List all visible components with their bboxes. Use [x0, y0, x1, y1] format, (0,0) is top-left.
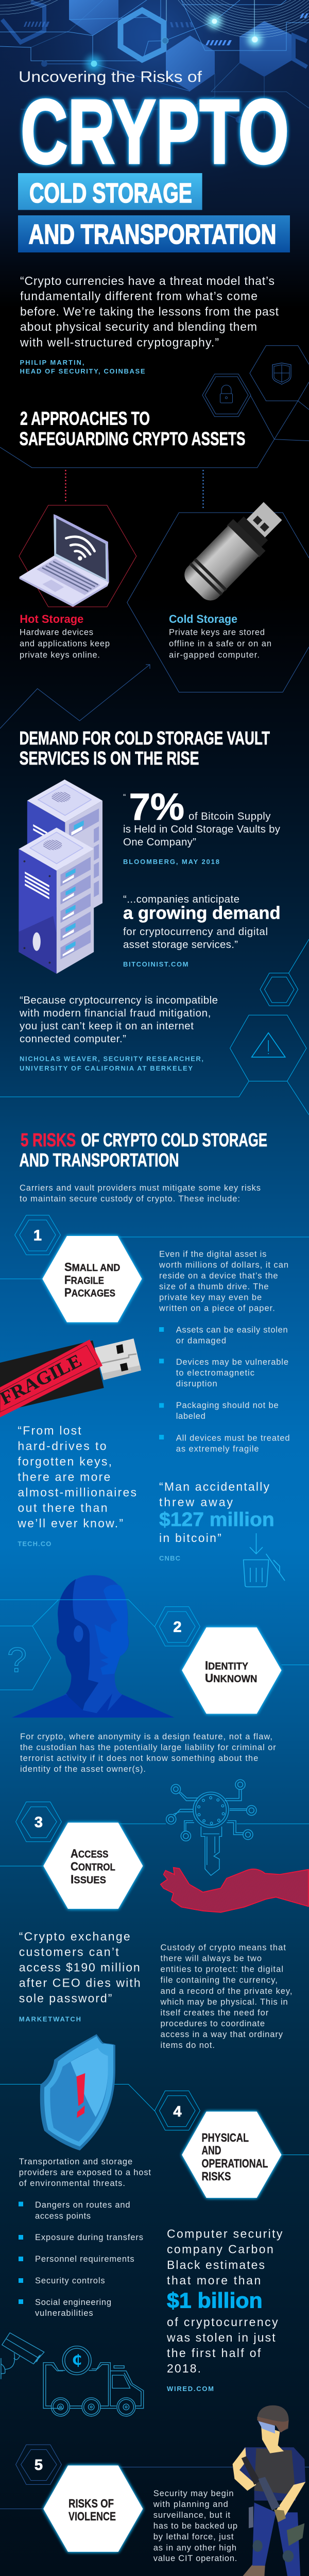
quote: 7 percent statistic: of Bitcoin Supply — [188, 810, 271, 822]
quote: 1 billion stolen — [166, 2227, 283, 2375]
opening quote: before. We’re taking the lessons from the past — [20, 305, 279, 318]
quote: 127 million in bitcoin: $127 million — [159, 1509, 274, 1531]
quote: growing demand — [123, 893, 281, 951]
number hexagon 1: 1 — [33, 1228, 42, 1244]
risk 3 label hexagon: CONTROL — [71, 1860, 115, 1873]
heading: demand for cold storage — [20, 727, 270, 769]
illustration: usb with fragile label — [0, 1338, 141, 1417]
risk 1 description: Even if the digital asset is — [159, 1249, 266, 1259]
risk 1 description: worth millions of dollars, it can — [159, 1260, 288, 1269]
server drive bays — [60, 857, 91, 959]
source: Bitcoinist: BITCOINIST.COM — [123, 960, 188, 968]
risk 1 connector lines — [0, 1237, 309, 1279]
quote: 127 million in bitcoin: “Man accidentally — [159, 1480, 270, 1494]
opening quote: “Crypto currencies have a threat model that’s — [20, 274, 274, 287]
header tech artwork — [0, 0, 309, 216]
risk 3 description: and a record of the private key, — [161, 1987, 293, 1996]
risk 1 bullet list: as extremely fragile — [176, 1445, 259, 1454]
quote: 190 million: customers can’t — [19, 1945, 119, 1958]
quote: Nicholas Weaver: with modern financial fraud mitigation, — [19, 1007, 211, 1019]
quote: Nicholas Weaver — [19, 994, 218, 1045]
quote: 190 million — [19, 1930, 141, 2005]
illustration: armed security guard — [233, 2405, 305, 2576]
source: Nicholas Weaver — [20, 1055, 203, 1072]
quote: growing demand: a growing demand — [123, 904, 281, 923]
hexagon network with warning icon — [0, 939, 309, 1115]
icon: laptop with wifi — [20, 514, 109, 607]
risk 3 description: items do not. — [161, 2041, 215, 2050]
risk 4 connector lines — [0, 2084, 309, 2155]
quote: almost-millionaires: we’ll ever know.” — [17, 1517, 123, 1530]
intro text: to maintain secure custody of crypto. These include: — [20, 1194, 240, 1204]
risk 2 description: terrorist activity if it does not know something about the — [20, 1754, 258, 1763]
risk 1 label hexagon: SMALL AND — [64, 1260, 120, 1274]
risk 3 description: Custody of crypto means that — [161, 1943, 286, 1953]
risk 1 bullet list: to electromagnetic — [176, 1368, 254, 1378]
banner: cold storage: COLD STORAGE — [29, 178, 192, 209]
quote: almost-millionaires: “From lost — [18, 1424, 81, 1437]
risk 1 bullet list: labeled — [176, 1412, 205, 1421]
number hexagon 2 — [154, 1607, 200, 1646]
risk 2 description: the custodian has the potentially large liability for criminal or — [20, 1743, 276, 1752]
dotted connector: hot storage — [65, 470, 66, 502]
quote: 190 million: sole password” — [19, 1991, 112, 2005]
source: CNBC: CNBC — [159, 1554, 181, 1562]
risk 4 label hexagon: RISKS — [202, 2170, 231, 2183]
intro text: Carriers and vault providers must mitigate some key risks — [20, 1183, 261, 1193]
text block: cold storage — [169, 613, 271, 659]
hexagon: cold storage — [127, 513, 309, 692]
source: Marketwatch: MARKETWATCH — [19, 2015, 81, 2023]
source: Tech.co: TECH.CO — [18, 1540, 51, 1548]
heading: 2 approaches — [20, 408, 245, 449]
risk 3 description: file containing the currency, — [161, 1976, 278, 1985]
risk 5 label hexagon: RISKS OF — [68, 2497, 114, 2510]
risk 3 description: entities to protect: the digital — [161, 1965, 283, 1974]
source: Bloomberg: BLOOMBERG, MAY 2018 — [123, 858, 219, 866]
intro text — [20, 1183, 261, 1204]
risk 4 label hexagon — [182, 2112, 281, 2198]
banner: cold storage — [18, 173, 202, 210]
risk 1 description — [159, 1249, 288, 1313]
source: Nicholas Weaver: NICHOLAS WEAVER, SECURITY RESEARCHER, — [20, 1055, 203, 1062]
text block: hot storage: private keys online. — [20, 650, 100, 659]
risk 1 label hexagon — [42, 1236, 142, 1322]
illustration: anonymous head silhouette — [12, 1575, 175, 1718]
text block: hot storage — [20, 613, 110, 659]
risk 4 bullet list: Dangers on routes and — [35, 2200, 130, 2210]
arrow: rising zig-zag — [0, 665, 150, 728]
quote: 7 percent statistic: is Held in Cold Storage Vaults by — [123, 823, 281, 835]
quote: 7 percent statistic: 7% — [129, 786, 184, 828]
risk 1 bullet list: or damaged — [176, 1336, 226, 1345]
risk 3 description: procedures to coordinate — [161, 2019, 265, 2028]
risk 3 description — [160, 1943, 293, 2050]
text block: cold storage: offline in a safe or on an — [169, 639, 271, 649]
risk 4 bullet list — [19, 2200, 143, 2318]
risk 1 bullet list: All devices must be treated — [176, 1433, 290, 1443]
quote: 1 billion stolen: that more than — [167, 2274, 261, 2287]
risk 2 label hexagon: UNKNOWN — [205, 1671, 257, 1685]
risk 2 label hexagon: IDENTITY — [205, 1658, 248, 1672]
risk 1 bullet list: Packaging should not be — [176, 1401, 279, 1410]
quote: growing demand: asset storage services.” — [123, 939, 238, 951]
quote: almost-millionaires: out there than — [18, 1501, 108, 1515]
quote: Nicholas Weaver: “Because cryptocurrency is incompatible — [20, 994, 218, 1006]
icon: warning triangle — [252, 1033, 285, 1057]
quote: 190 million: “Crypto exchange — [19, 1930, 130, 1943]
text block: cold storage: Cold Storage — [169, 613, 237, 625]
risk 4 label hexagon: OPERATIONAL — [202, 2157, 268, 2170]
quote: 127 million in bitcoin — [159, 1480, 274, 1545]
risk 5 description: surveillance, but it — [153, 2511, 230, 2520]
number hexagon 2: 2 — [173, 1619, 181, 1636]
risk 4 description: providers are exposed to a host — [19, 2168, 151, 2177]
quote: growing demand: “...companies anticipate — [123, 893, 239, 905]
risk 4 bullet list: access points — [35, 2211, 91, 2221]
number hexagon 5: 5 — [35, 2457, 43, 2473]
quote: growing demand: for cryptocurrency and digital — [123, 926, 268, 938]
quote: almost-millionaires: hard-drives to — [18, 1439, 107, 1453]
risk 2 label hexagon — [182, 1628, 281, 1714]
title: uncovering the risks of: Uncovering the Risks of — [19, 69, 202, 86]
icon: usb drive — [179, 495, 289, 606]
quote: almost-millionaires: there are more — [18, 1470, 110, 1484]
risk 4 bullet list: Personnel requirements — [35, 2255, 134, 2264]
icon: shield — [272, 363, 291, 384]
icon: trash can — [244, 1533, 285, 1587]
risk 4 bullet list: Social engineering — [35, 2298, 111, 2307]
risk 4 description — [19, 2157, 151, 2188]
heading: 5 risks: AND TRANSPORTATION — [20, 1149, 179, 1171]
text block: hot storage: and applications keep — [20, 639, 110, 649]
icon: armored truck with coin — [43, 2346, 144, 2416]
risk 3 label hexagon — [43, 1823, 143, 1909]
quote: 7 percent statistic: “ — [123, 793, 126, 802]
text block: cold storage: Private keys are stored — [169, 628, 265, 637]
quote: almost-millionaires — [17, 1424, 136, 1530]
risk 5 description: as in any other high — [153, 2543, 236, 2552]
risk 2 description: identity of the asset owner(s). — [20, 1765, 146, 1774]
risk 5 description — [153, 2489, 237, 2563]
quote: 1 billion stolen: 2018. — [167, 2362, 201, 2375]
quote: 1 billion stolen: $1 billion — [167, 2288, 263, 2312]
number hexagon 3: 3 — [35, 1815, 43, 1831]
number hexagon 4: 4 — [173, 2104, 181, 2120]
quote: 190 million: after CEO dies with — [19, 1976, 141, 1989]
number hexagon 3 — [16, 1802, 61, 1842]
risk 1 label hexagon: PACKAGES — [64, 1286, 115, 1299]
risk 3 label hexagon: ACCESS — [71, 1847, 108, 1860]
quote: 190 million: access $190 million — [19, 1961, 140, 1974]
risk 1 description: size of a thumb drive. The — [159, 1282, 269, 1292]
risk 5 description: Security may begin — [153, 2489, 234, 2498]
text block: hot storage: Hardware devices — [20, 628, 93, 637]
risk 4 description: of environmental threats. — [19, 2179, 125, 2188]
quote: almost-millionaires: almost-millionaires — [18, 1485, 136, 1499]
risk 3 description: access in a way that ordinary — [161, 2030, 283, 2039]
risk 5 description: value CIT operation. — [153, 2554, 237, 2563]
hexagon network with lock and shield icons — [0, 346, 309, 468]
risk 2 description — [20, 1732, 276, 1774]
quote: 1 billion stolen: company Carbon — [167, 2243, 273, 2256]
risk 5 label hexagon: VIOLENCE — [68, 2510, 116, 2523]
risk 1 description: reside on a device that’s the — [159, 1272, 278, 1281]
quote: 1 billion stolen: the first half of — [167, 2346, 261, 2360]
risk 1 description: private key may even be — [159, 1293, 262, 1302]
risk 4 bullet list: Exposure during transfers — [35, 2233, 143, 2242]
quote: Nicholas Weaver: connected computer.” — [20, 1033, 126, 1045]
quote: almost-millionaires: forgotten keys, — [18, 1455, 112, 1468]
icon: padlock — [220, 385, 233, 403]
quote: 7 percent statistic — [123, 786, 281, 848]
illustration: warning shield — [40, 2034, 115, 2150]
risk 3 description: itself creates the need for — [161, 2008, 269, 2018]
illustration: red wireframe hand — [161, 1868, 308, 1912]
quote: 1 billion stolen: Black estimates — [167, 2258, 265, 2272]
risk 1 bullet list: Devices may be vulnerable — [176, 1358, 288, 1367]
heading: demand for cold storage: SERVICES IS ON THE RISE — [20, 748, 199, 769]
quote: 127 million in bitcoin: in bitcoin” — [159, 1531, 221, 1545]
risk 4 label hexagon: AND — [202, 2144, 221, 2157]
risk 1 label hexagon: FRAGILE — [64, 1273, 104, 1286]
risk 3 label hexagon: ISSUES — [71, 1872, 106, 1886]
risk 2 connector lines with question mark hexagon — [0, 1600, 309, 1690]
risk 4 label hexagon: PHYSICAL — [202, 2131, 249, 2144]
quote: 1 billion stolen: of cryptocurrency — [167, 2315, 278, 2329]
risk 2 description: For crypto, where anonymity is a design feature, not a flaw, — [20, 1732, 272, 1741]
risk 5 description: has to be backed up — [153, 2521, 237, 2531]
risk 4 bullet list: Security controls — [35, 2276, 105, 2285]
risk 3 description: there will always be two — [161, 1954, 262, 1963]
quote attribution: Philip Martin — [20, 359, 145, 375]
risk 1 bullet list: disruption — [176, 1379, 217, 1388]
source: Nicholas Weaver: UNIVERSITY OF CALIFORNIA AT BERKELEY — [20, 1064, 193, 1072]
illustration: server racks — [19, 779, 102, 974]
quote: 1 billion stolen: was stolen in just — [166, 2331, 276, 2344]
risk 1 bullet list — [159, 1325, 290, 1454]
opening quote: with well-structured cryptography.” — [20, 336, 219, 349]
hexagon: hot storage — [19, 505, 136, 607]
icon: coin symbol: ₵ — [72, 2351, 82, 2368]
risk 3 description: which may be physical. This in — [160, 1997, 288, 2007]
number hexagon 5 — [16, 2445, 61, 2484]
opening quote: about physical security and blending them — [20, 320, 257, 333]
icon: circuit key — [166, 1780, 256, 1875]
text block: hot storage: Hot Storage — [20, 613, 83, 625]
risk 4 description: Transportation and storage — [19, 2157, 132, 2166]
quote: 127 million in bitcoin: threw away — [159, 1495, 233, 1509]
risk 5 connector lines — [0, 2467, 309, 2509]
text block: cold storage: air-gapped computer. — [169, 650, 260, 659]
risk 1 description: written on a piece of paper. — [159, 1304, 275, 1313]
heading: 2 approaches: 2 APPROACHES TO — [20, 408, 150, 429]
opening quote: fundamentally different from what’s come — [20, 290, 258, 303]
icon: cctv camera — [1, 2333, 44, 2379]
opening quote — [20, 274, 279, 349]
heading: 5 risks: 5 RISKS — [21, 1129, 76, 1150]
quote attribution: Philip Martin: HEAD OF SECURITY, COINBASE — [20, 367, 145, 375]
number hexagon 1 — [15, 1215, 61, 1255]
risk 5 label hexagon — [43, 2466, 143, 2552]
heading: 5 risks — [20, 1129, 267, 1171]
dotted connector: cold storage — [202, 470, 204, 510]
number hexagon 4 — [154, 2091, 200, 2130]
icon: question mark: ? — [7, 1640, 27, 1680]
risk 4 bullet list: vulnerabilities — [35, 2309, 93, 2318]
quote: 7 percent statistic: One Company” — [123, 836, 196, 848]
quote attribution: Philip Martin: PHILIP MARTIN, — [20, 359, 84, 366]
quote: Nicholas Weaver: you just can’t keep it on an internet — [20, 1020, 194, 1032]
source: Wired: WIRED.COM — [167, 2385, 214, 2393]
quote: 1 billion stolen: Computer security — [167, 2227, 283, 2240]
risk 1 bullet list: Assets can be easily stolen — [176, 1325, 288, 1334]
risk 5 description: with planning and — [153, 2500, 228, 2509]
risk 5 description: by lethal force, just — [153, 2532, 234, 2541]
risk 3 connector line — [0, 1824, 309, 1866]
